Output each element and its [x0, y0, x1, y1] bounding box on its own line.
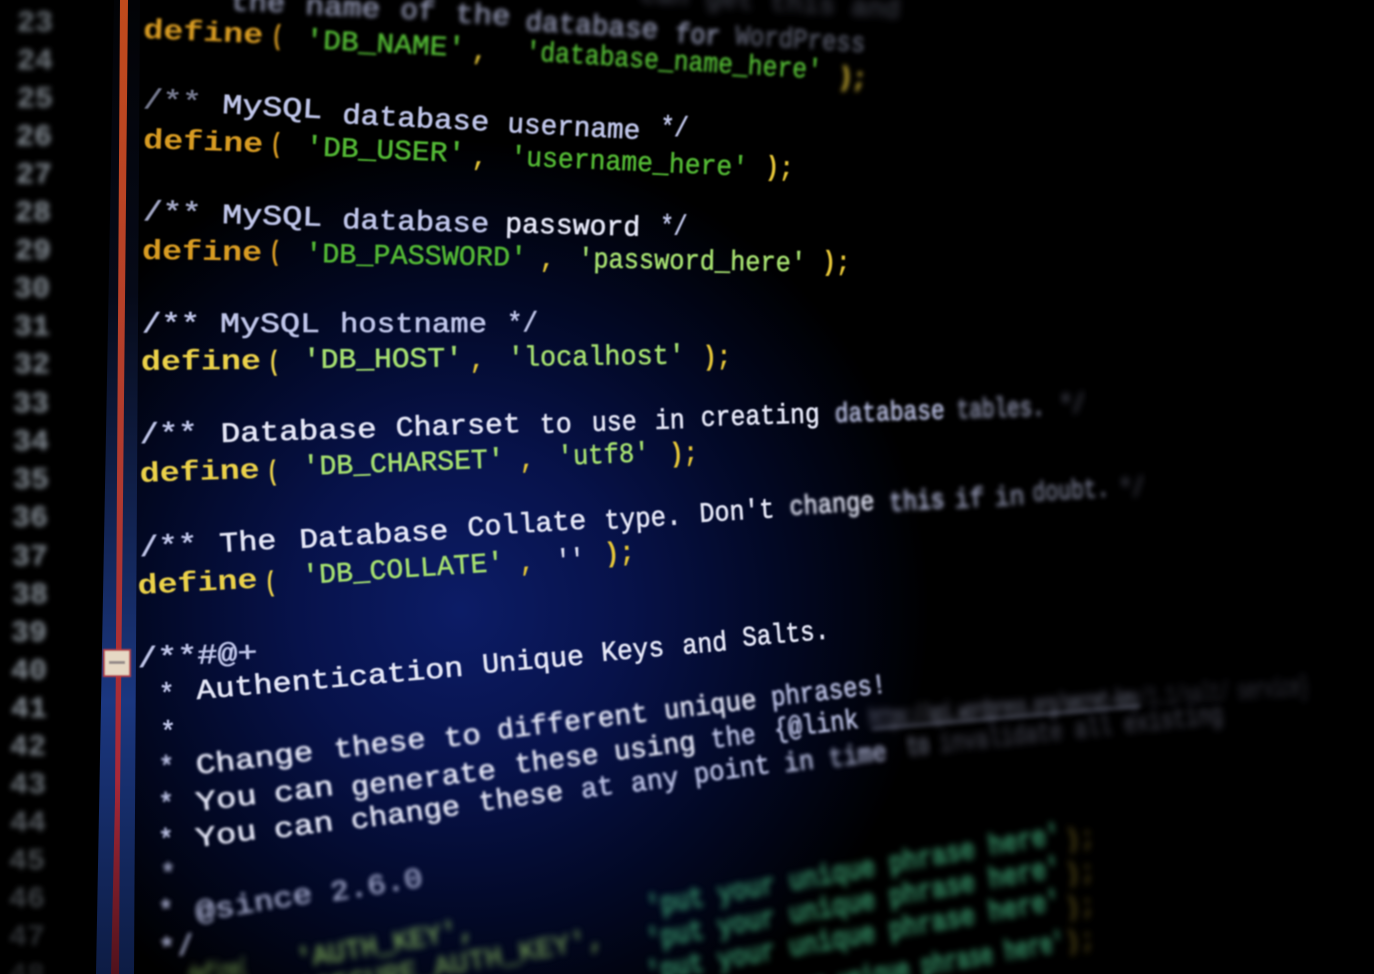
docblock: Change these to different unique phrases: *	[158, 752, 177, 785]
define DB_HOST: 'DB_HOST'	[303, 344, 463, 377]
docblock: Authentication Unique Keys and Salts: and	[681, 628, 729, 663]
docblock: You can change these at any point: invalidate all existing	[938, 700, 1224, 761]
define DB_COLLATE: 'DB_COLLATE'	[302, 549, 505, 593]
define DB_NAME: 'DB_NAME'	[305, 26, 466, 65]
define DB_USER: 'DB_USER'	[305, 133, 466, 171]
define DB_USER: ,	[472, 143, 487, 175]
comment: Database Charset: tables.	[956, 393, 1045, 427]
docblock: You can generate these using the link: {@link	[772, 706, 860, 747]
line numbers column	[9, 7, 53, 974]
docblock: You can generate these using the link: can	[272, 773, 336, 811]
docblock: Authentication Unique Keys and Salts: *	[158, 680, 177, 712]
define DB_HOST: 'localhost'	[508, 342, 685, 375]
line numbers column: 32	[14, 349, 50, 383]
comment: MySQL hostname: /**	[142, 310, 200, 341]
define DB_USER: (	[270, 130, 283, 161]
comment: MySQL hostname: hostname	[340, 310, 487, 341]
docblock: Change these to different unique phrases	[158, 670, 888, 785]
docblock: You can generate these using the link: these	[513, 741, 600, 782]
define DB_CHARSET: (	[266, 458, 279, 489]
docblock: You can change these at any point: time	[827, 738, 889, 776]
comment: Database Collate type: Collate	[467, 507, 587, 545]
comment: Database Collate type: type.	[604, 502, 682, 538]
define DB_NAME: define	[143, 16, 264, 52]
editor gutter strip	[96, 0, 140, 974]
define DB_HOST: define	[141, 347, 261, 379]
line numbers column: 47	[9, 921, 45, 955]
comment: name of the database: for	[674, 20, 721, 54]
docblock: since version: */	[157, 931, 197, 967]
define DB_PASSWORD	[142, 237, 850, 280]
line numbers column: 30	[14, 273, 50, 307]
comment: Database Collate type	[139, 473, 1146, 565]
define DB_COLLATE: ''	[556, 545, 586, 578]
docblock: You can change these at any point: point	[692, 751, 773, 792]
docblock: Change these to different unique phrases: unique	[662, 686, 758, 728]
define DB_NAME: );	[837, 63, 867, 96]
comment: Database Charset: Charset	[395, 410, 521, 445]
comment: Database Collate type: in	[994, 482, 1026, 515]
comment: Database Collate type: doubt.	[1032, 474, 1110, 510]
comment: Database Charset: use	[591, 408, 637, 440]
comment: name of the database: the	[455, 0, 511, 34]
define DB_CHARSET	[139, 439, 698, 491]
docblock: You can generate these using the link: generate	[349, 756, 498, 805]
comment: MySQL hostname	[142, 309, 538, 341]
docblock: You can change these at any point: change	[349, 792, 462, 838]
comment: MySQL database password: */	[660, 212, 688, 244]
comment: MySQL database username: /**	[143, 86, 202, 120]
line numbers column: 43	[10, 769, 46, 803]
docblock: You can change these at any point: any	[629, 764, 681, 801]
define DB_COLLATE: ,	[519, 548, 535, 580]
docblock: You can change these at any point	[157, 700, 1224, 858]
comment: name of the database: database	[524, 8, 659, 47]
define DB_HOST: );	[703, 343, 731, 374]
line numbers column: 28	[15, 197, 51, 231]
line numbers column: 37	[12, 541, 48, 575]
docblock: since version: *	[157, 896, 177, 929]
line numbers column: 25	[17, 83, 53, 117]
define DB_HOST: (	[268, 348, 280, 379]
define DB_HOST: ,	[470, 346, 484, 377]
define DB_PASSWORD: ,	[540, 245, 554, 276]
define DB_HOST	[141, 342, 731, 379]
comment: MySQL database password: password	[505, 210, 641, 245]
define DB_USER: define	[143, 126, 264, 161]
define DB_CHARSET: 'DB_CHARSET'	[302, 445, 505, 484]
docblock: You can generate these using the link: the	[709, 721, 758, 757]
docblock: Change these to different unique phrases: different	[495, 699, 650, 748]
docblock: Change these to different unique phrases: Change	[194, 738, 315, 783]
line numbers column: 46	[9, 883, 45, 917]
comment: MySQL database username: */	[660, 113, 689, 145]
docblock: You can change these at any point: can	[272, 808, 336, 847]
comment: name of the database: WordPress	[734, 22, 866, 61]
blurred phrase placeholders: );	[1064, 857, 1097, 891]
docblock: You can generate these using the link: using	[612, 728, 697, 769]
comment: Database Collate type: The	[219, 526, 277, 561]
line numbers column: 33	[13, 388, 49, 422]
docblock: Authentication Unique Keys and Salts: Keys	[600, 634, 666, 670]
comment: MySQL database password: database	[342, 206, 490, 241]
define DB_COLLATE: );	[604, 538, 636, 571]
comment: Database Charset: */	[1059, 390, 1085, 422]
define DB_CHARSET: ,	[519, 445, 534, 477]
define DB_PASSWORD: define	[142, 237, 262, 270]
red margin line	[111, 0, 128, 974]
comment: Database Charset: database	[834, 397, 945, 431]
comment: MySQL database username: username	[507, 110, 641, 148]
docblock: Change these to different unique phrases: these	[332, 725, 427, 767]
docblock: Change these to different unique phrases: to	[442, 721, 483, 756]
blurred phrase placeholders: );	[1064, 891, 1097, 925]
line numbers column: 40	[11, 655, 47, 689]
docblock: Change these to different unique phrases: phrases!	[769, 670, 888, 715]
docblock: since version	[157, 860, 425, 967]
define DB_CHARSET: 'utf8'	[557, 439, 650, 474]
code fold marker	[104, 650, 130, 676]
docblock: Authentication Unique Keys and Salts	[137, 617, 830, 749]
docblock: Authentication Unique Keys and Salts: Authentication	[195, 654, 465, 708]
docblock: You can change these at any point: at	[579, 772, 616, 807]
blurred phrase placeholders: );	[1064, 823, 1097, 857]
define DB_USER: );	[765, 153, 794, 185]
define DB_CHARSET: define	[139, 456, 260, 491]
docblock: You can change these at any point: in	[782, 747, 816, 781]
comment: Database Collate type: Don't	[699, 495, 775, 531]
comment: Database Charset: Database	[220, 415, 377, 451]
docblock: Authentication Unique Keys and Salts: *	[160, 718, 176, 749]
define DB_USER: 'username_here'	[510, 143, 749, 185]
define DB_PASSWORD: 'DB_PASSWORD'	[305, 240, 527, 275]
line numbers column: 36	[12, 502, 48, 536]
line numbers column: 34	[13, 426, 49, 460]
comment: name of the database	[230, 0, 901, 61]
docblock: You can generate these using the link	[157, 672, 1310, 822]
comment: MySQL database username: database	[342, 101, 490, 140]
line numbers column: 44	[10, 807, 46, 841]
line numbers column: 41	[11, 693, 47, 727]
comment: MySQL database username: MySQL	[222, 91, 323, 127]
comment: MySQL database password: /**	[143, 198, 202, 231]
docblock: since version: *	[160, 860, 176, 891]
define DB_NAME: 'database_name_here'	[524, 38, 823, 88]
line numbers column: 23	[17, 7, 53, 41]
comment: Database Charset	[139, 390, 1085, 452]
define DB_CHARSET: );	[669, 439, 698, 471]
define DB_COLLATE: (	[264, 568, 277, 600]
define DB_PASSWORD: );	[822, 248, 850, 280]
line numbers column: 31	[14, 311, 50, 345]
comment: Database Collate type: change	[789, 488, 875, 524]
comment: MySQL hostname: MySQL	[220, 310, 320, 341]
blurred phrase placeholders: );	[1064, 925, 1097, 959]
comment: Database Charset: /**	[139, 419, 198, 452]
line numbers column: 42	[10, 731, 46, 765]
define DB_USER	[143, 126, 794, 185]
docblock: since version: @since	[193, 880, 315, 930]
line numbers column: 24	[17, 45, 53, 79]
line numbers column: 29	[15, 235, 51, 269]
comment: Database Collate type: /**	[139, 531, 198, 565]
line numbers column: 45	[9, 845, 45, 879]
comment: Database Collate type: Database	[299, 517, 449, 557]
blurred phrase placeholders: 'put your unique phrase here'	[644, 853, 1063, 957]
docblock: You can change these at any point: *	[157, 825, 177, 858]
comment: Database Collate type: */	[1119, 473, 1146, 506]
docblock: You can generate these using the link: You	[194, 782, 259, 820]
docblock: since version: 2.6.0	[328, 864, 425, 910]
comment: MySQL database username	[143, 86, 689, 148]
docblock: Authentication Unique Keys and Salts: Unique	[481, 642, 585, 682]
comment: Database Collate type: this	[889, 486, 945, 520]
blurred phrase placeholders: 'put your unique phrase here'	[644, 820, 1063, 924]
docblock: You can generate these using the link: *	[157, 789, 177, 822]
comment: Database Charset: to	[539, 410, 572, 442]
define DB_COLLATE	[137, 538, 636, 603]
define DB_NAME	[143, 16, 867, 96]
docblock: Authentication Unique Keys and Salts: /**#@+	[137, 639, 258, 676]
line numbers column: 39	[11, 617, 47, 651]
define DB_PASSWORD: (	[269, 238, 281, 269]
define DB_PASSWORD: 'password_here'	[578, 245, 806, 280]
line numbers column: 27	[16, 159, 52, 193]
define DB_NAME: (	[271, 22, 284, 54]
docblock: Authentication Unique Keys and Salts: Salts.	[741, 617, 830, 655]
comment: Database Collate type: if	[954, 484, 986, 517]
docblock: You can change these at any point: You	[194, 817, 259, 856]
docblock: You can change these at any point: to	[906, 731, 931, 764]
define DB_NAME: ,	[472, 37, 487, 69]
line numbers column: 35	[13, 464, 49, 498]
blurred AUTH_KEY defines	[187, 915, 607, 974]
line numbers column: 26	[16, 121, 52, 155]
comment: MySQL database password	[143, 198, 688, 245]
comment: Database Charset: creating	[700, 400, 820, 435]
define DB_COLLATE: define	[137, 566, 258, 603]
comment: MySQL database password: MySQL	[222, 201, 323, 235]
docblock: You can change these at any point: these	[477, 778, 565, 820]
comment: Database Charset: in	[654, 406, 685, 438]
comment: MySQL hostname: */	[507, 309, 538, 340]
line numbers column: 38	[12, 579, 48, 613]
